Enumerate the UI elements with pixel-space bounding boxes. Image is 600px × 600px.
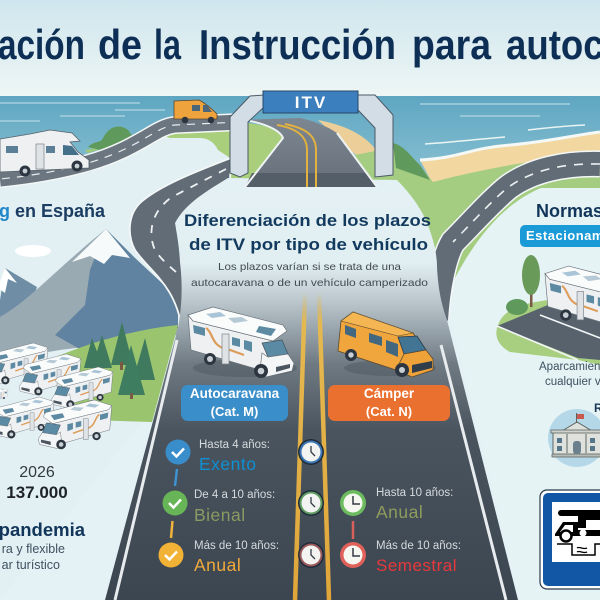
upper left road xyxy=(0,122,240,179)
badge: camper: Cámper xyxy=(364,386,415,401)
central heading: de ITV por tipo de vehículo xyxy=(189,235,428,254)
badge: autocaravana xyxy=(181,385,288,421)
right beach xyxy=(318,120,600,184)
connector blue xyxy=(175,469,177,486)
timer icon green xyxy=(340,490,366,516)
left heading: g en España xyxy=(0,201,106,221)
small orange camper on road xyxy=(174,100,217,123)
connector red xyxy=(352,521,354,539)
central subtitle xyxy=(191,261,428,289)
clock blue xyxy=(298,439,324,465)
parking scene xyxy=(496,255,600,365)
badge: camper: (Cat. N) xyxy=(366,404,412,419)
connector yellow xyxy=(171,521,172,538)
central heading xyxy=(184,211,431,254)
row: de 4 a 10 años bienal xyxy=(194,489,275,525)
badge: camper xyxy=(328,385,450,421)
row: mas de 10 años anual: Anual xyxy=(194,555,241,575)
green hill with trees xyxy=(38,322,178,422)
left pandemic text: ra y flexible xyxy=(2,542,65,556)
motorhome main xyxy=(188,307,297,378)
check icon blue xyxy=(166,440,190,464)
left pandemic text: pandemia xyxy=(0,519,86,540)
badge: autocaravana: (Cat. M) xyxy=(211,404,258,419)
row: hasta 4 años exento xyxy=(199,439,270,474)
main title xyxy=(0,21,600,68)
left pandemic text: ar turístico xyxy=(2,558,60,572)
main title: Instrucción xyxy=(199,21,396,68)
clock red xyxy=(298,542,324,568)
parking caption xyxy=(539,361,600,388)
road double yellow line xyxy=(295,292,329,600)
itv arch xyxy=(230,91,393,177)
row: de 4 a 10 años bienal: Bienal xyxy=(194,505,246,525)
row: hasta 4 años exento: Hasta 4 años: xyxy=(199,439,270,451)
itv arch: ITV xyxy=(295,93,327,112)
top central road xyxy=(240,118,377,187)
icon: town hall xyxy=(548,409,600,467)
timer icon red xyxy=(340,542,366,568)
central heading: Diferenciación de los plazos xyxy=(184,211,431,230)
left pandemic text xyxy=(0,519,86,572)
left lower land xyxy=(0,125,240,600)
main title: ación xyxy=(0,21,85,68)
clock green xyxy=(298,490,324,516)
camper van main xyxy=(338,312,436,377)
statistic 2026: 2026 xyxy=(19,464,55,481)
row: mas de 10 años semestral: Semestral xyxy=(376,556,457,575)
row: mas de 10 años semestral xyxy=(376,540,461,575)
main title: para xyxy=(412,21,492,68)
check icon yellow xyxy=(158,542,184,568)
right curved road xyxy=(436,164,600,320)
row: hasta 4 años exento: Exento xyxy=(199,454,256,474)
right panel background xyxy=(446,188,600,600)
statistic 2026: 137.000 xyxy=(6,483,68,502)
main title: de xyxy=(98,21,142,68)
row: mas de 10 años anual: Más de 10 años: xyxy=(194,540,279,552)
left green land xyxy=(85,120,283,187)
right bushes xyxy=(393,143,430,180)
row: hasta 10 años anual xyxy=(376,487,453,522)
right green land xyxy=(355,143,600,300)
central subtitle: autocaravana o de un vehículo camperizado xyxy=(191,277,428,289)
sea xyxy=(0,96,600,186)
badge: autocaravana: Autocaravana xyxy=(190,386,280,401)
row: de 4 a 10 años bienal: De 4 a 10 años: xyxy=(194,489,275,501)
main title: la xyxy=(154,21,181,68)
right pill xyxy=(520,225,600,247)
statistic 2026 xyxy=(6,464,68,502)
central subtitle: Los plazos varían si se trata de una xyxy=(218,261,401,273)
check icon green xyxy=(162,490,188,516)
mountains xyxy=(0,229,178,360)
left curved road xyxy=(130,158,231,330)
central road panel xyxy=(105,178,518,600)
row: hasta 10 años anual: Anual xyxy=(376,502,423,522)
motorhome on top left road xyxy=(0,130,89,176)
road white edge lines xyxy=(115,340,506,600)
motorhome fleet xyxy=(0,343,113,449)
row: mas de 10 años semestral: Más de 10 años: xyxy=(376,540,461,552)
row: hasta 10 años anual: Hasta 10 años: xyxy=(376,487,453,499)
row: mas de 10 años anual xyxy=(194,540,279,575)
road sign xyxy=(540,490,600,589)
sky background xyxy=(0,0,600,97)
